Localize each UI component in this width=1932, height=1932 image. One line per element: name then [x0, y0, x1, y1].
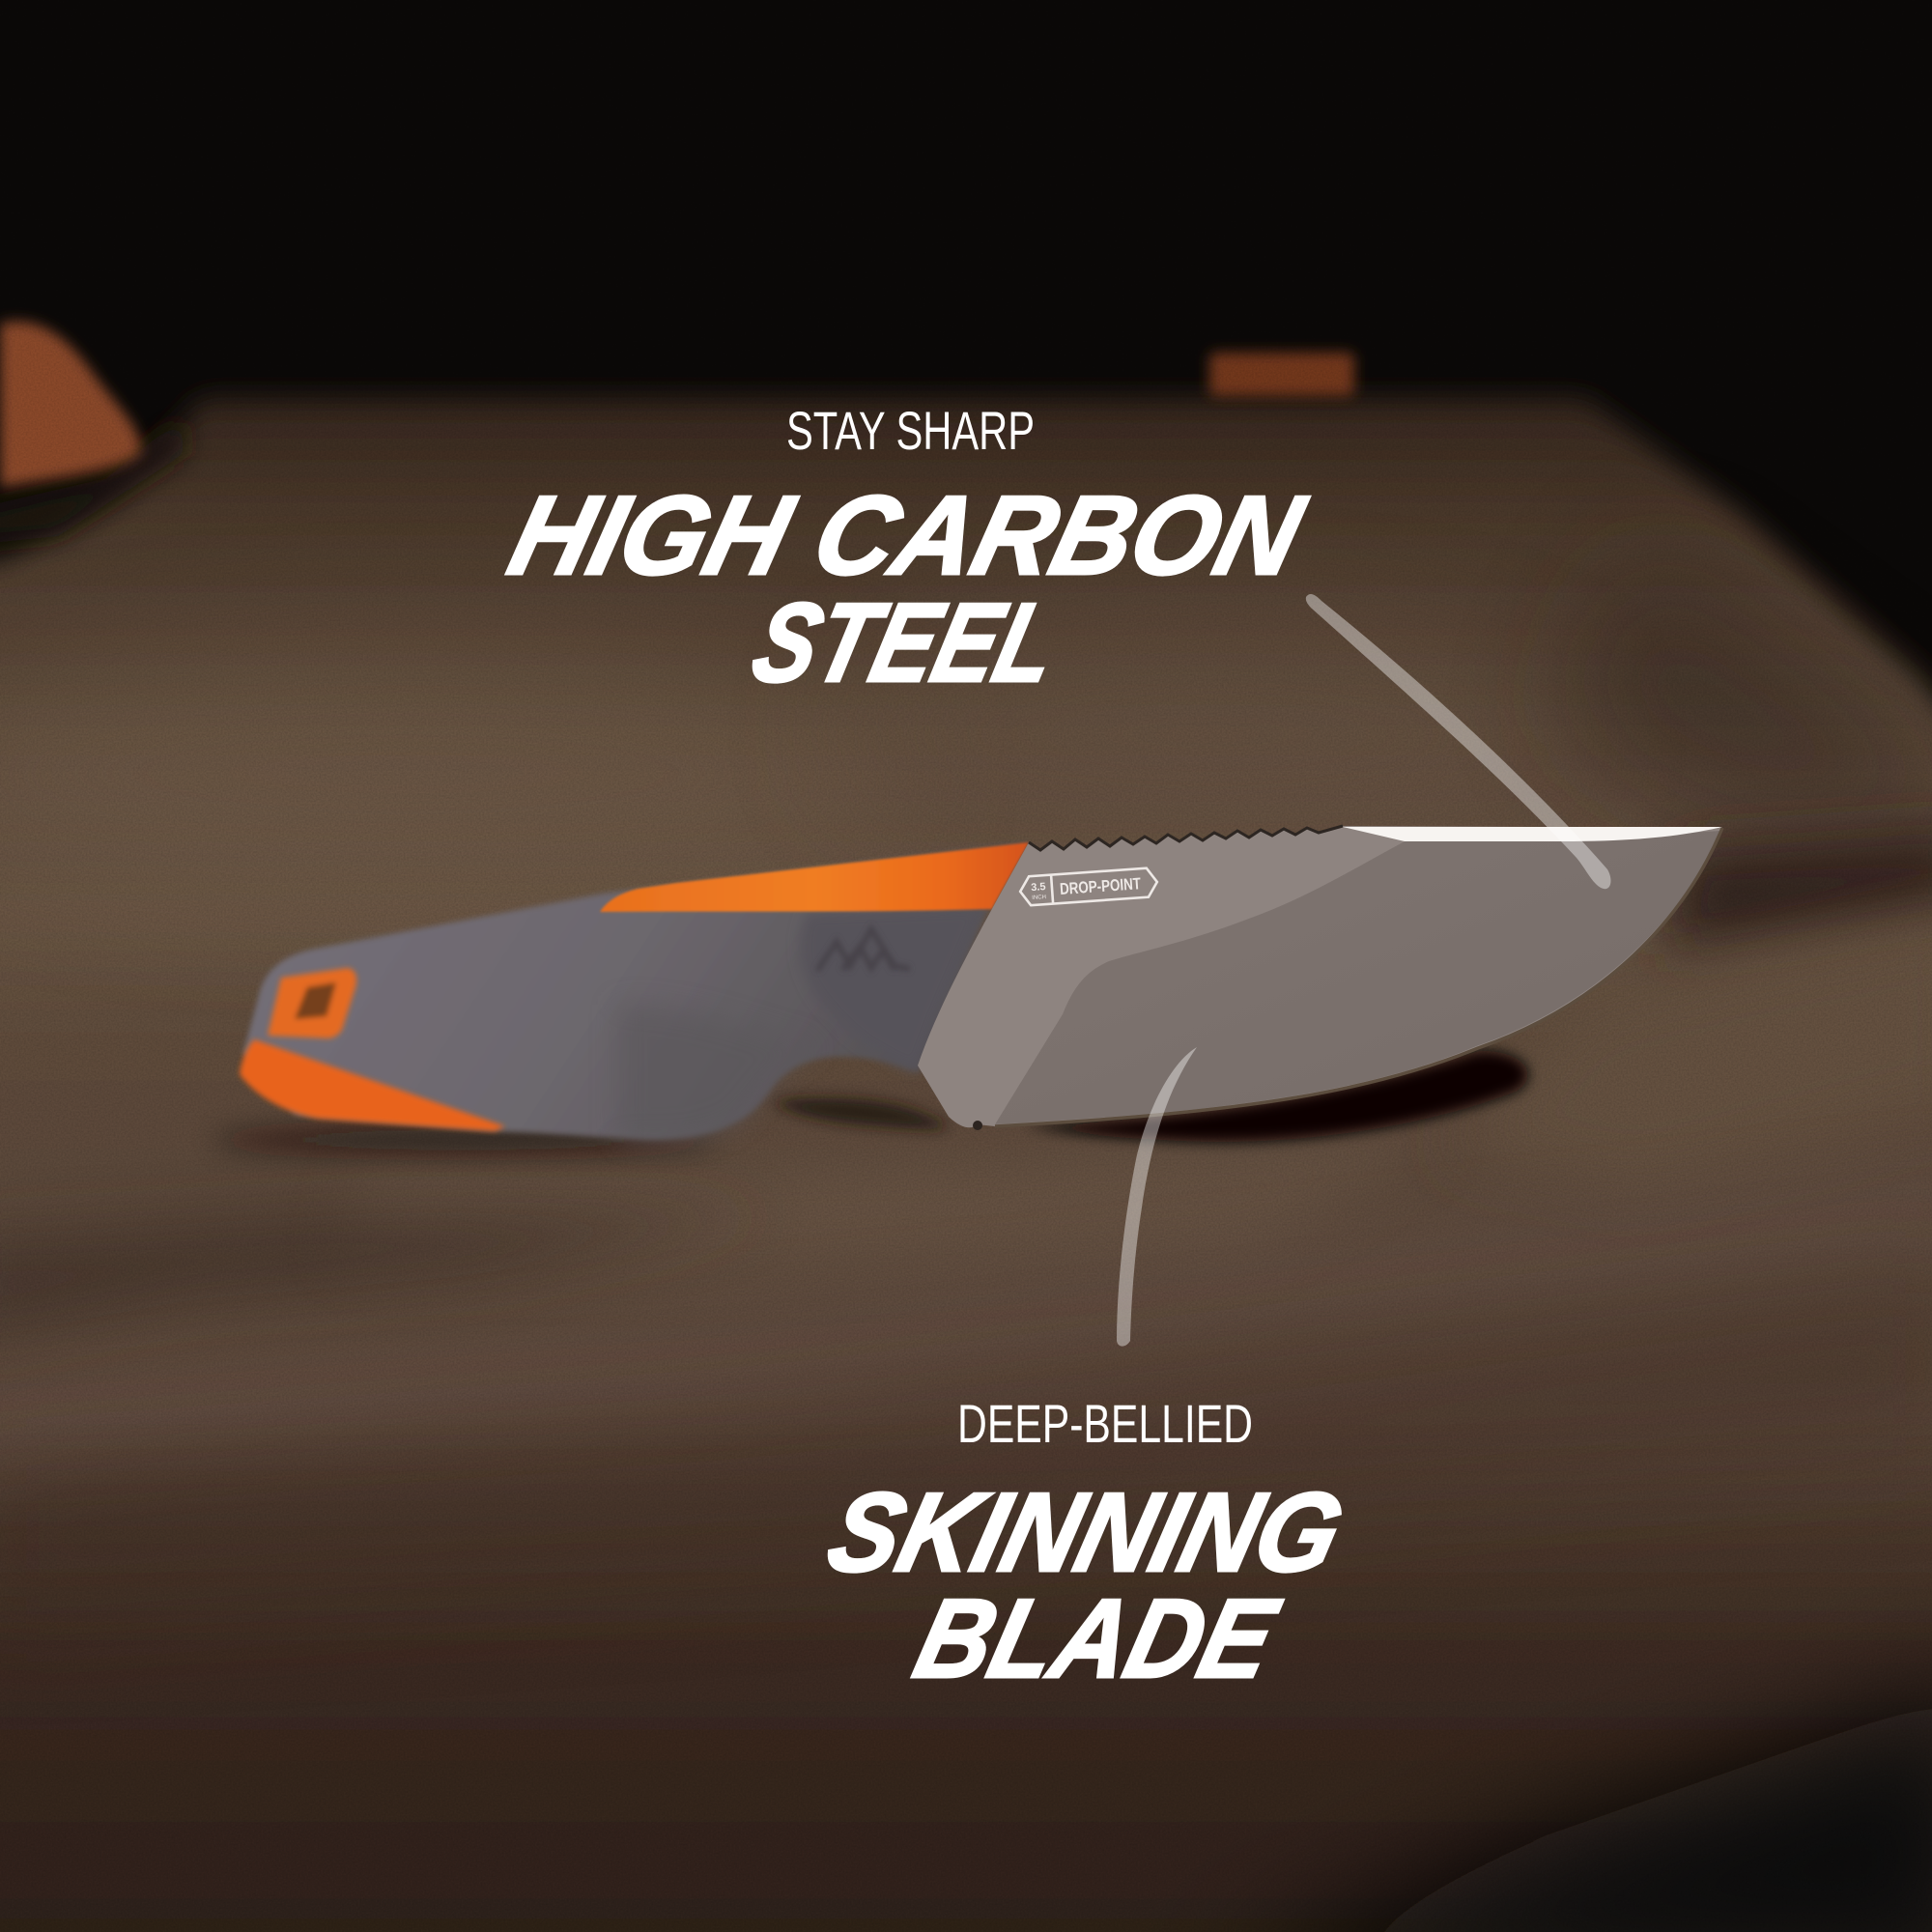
knife: [240, 826, 1722, 1140]
lanyard hole: [268, 968, 356, 1038]
heading: skinning blade: [817, 1469, 1354, 1701]
cloth weave noise: [0, 406, 1932, 1932]
logo: mountains: [817, 929, 910, 971]
blade badge: 3.5: [1031, 881, 1046, 894]
right fold: dark band behind blade tip: [1662, 831, 1932, 956]
handle lower dark facet: [618, 1005, 821, 1140]
orange-brown blurred tab at top: [1209, 353, 1354, 396]
handle top orange grip: [600, 842, 1029, 912]
heading: high carbon steel: [498, 472, 1317, 705]
handle butt orange cap: [240, 1039, 505, 1131]
blade badge: INCH: [1032, 895, 1046, 901]
blade flat grind: [995, 831, 1720, 1124]
orange-brown blurred strap at left: [0, 322, 141, 488]
fold below handle: [0, 1212, 773, 1343]
heading: skinning blade: SKINNING: [817, 1469, 1354, 1595]
blade sharpened edge highlight: [1343, 827, 1722, 841]
blade notch: [973, 1121, 982, 1130]
callout line: to spine edge: [1306, 594, 1610, 889]
blade badge: [1019, 867, 1158, 906]
blade base and bevel: [918, 826, 1722, 1127]
callout line: to blade belly: [1117, 1047, 1197, 1347]
cloth lighting: [0, 647, 908, 898]
left dark fold shadow: [0, 415, 184, 546]
eyebrow: stay sharp: STAY SHARP: [786, 400, 1035, 461]
right fold: lit cloth: [1449, 918, 1932, 1188]
blade belly edge: [995, 828, 1722, 1126]
handle dark grip: [800, 906, 985, 1072]
heading: high carbon steel: STEEL: [742, 580, 1070, 705]
lit cloth directly below knife: [338, 1130, 1449, 1265]
heading: high carbon steel: HIGH CARBON: [498, 472, 1317, 598]
handle body: [243, 842, 1029, 1140]
bottom right dark corner: [1208, 1681, 1932, 1932]
eyebrow: deep-bellied: DEEP-BELLIED: [957, 1393, 1253, 1454]
blade badge: DROP-POINT: [1059, 874, 1142, 898]
knife shadow on cloth: [213, 1051, 1528, 1151]
right edge darker cloth: [1546, 541, 1932, 831]
blade spine serrations: [1029, 826, 1343, 850]
heading: skinning blade: BLADE: [904, 1576, 1290, 1701]
